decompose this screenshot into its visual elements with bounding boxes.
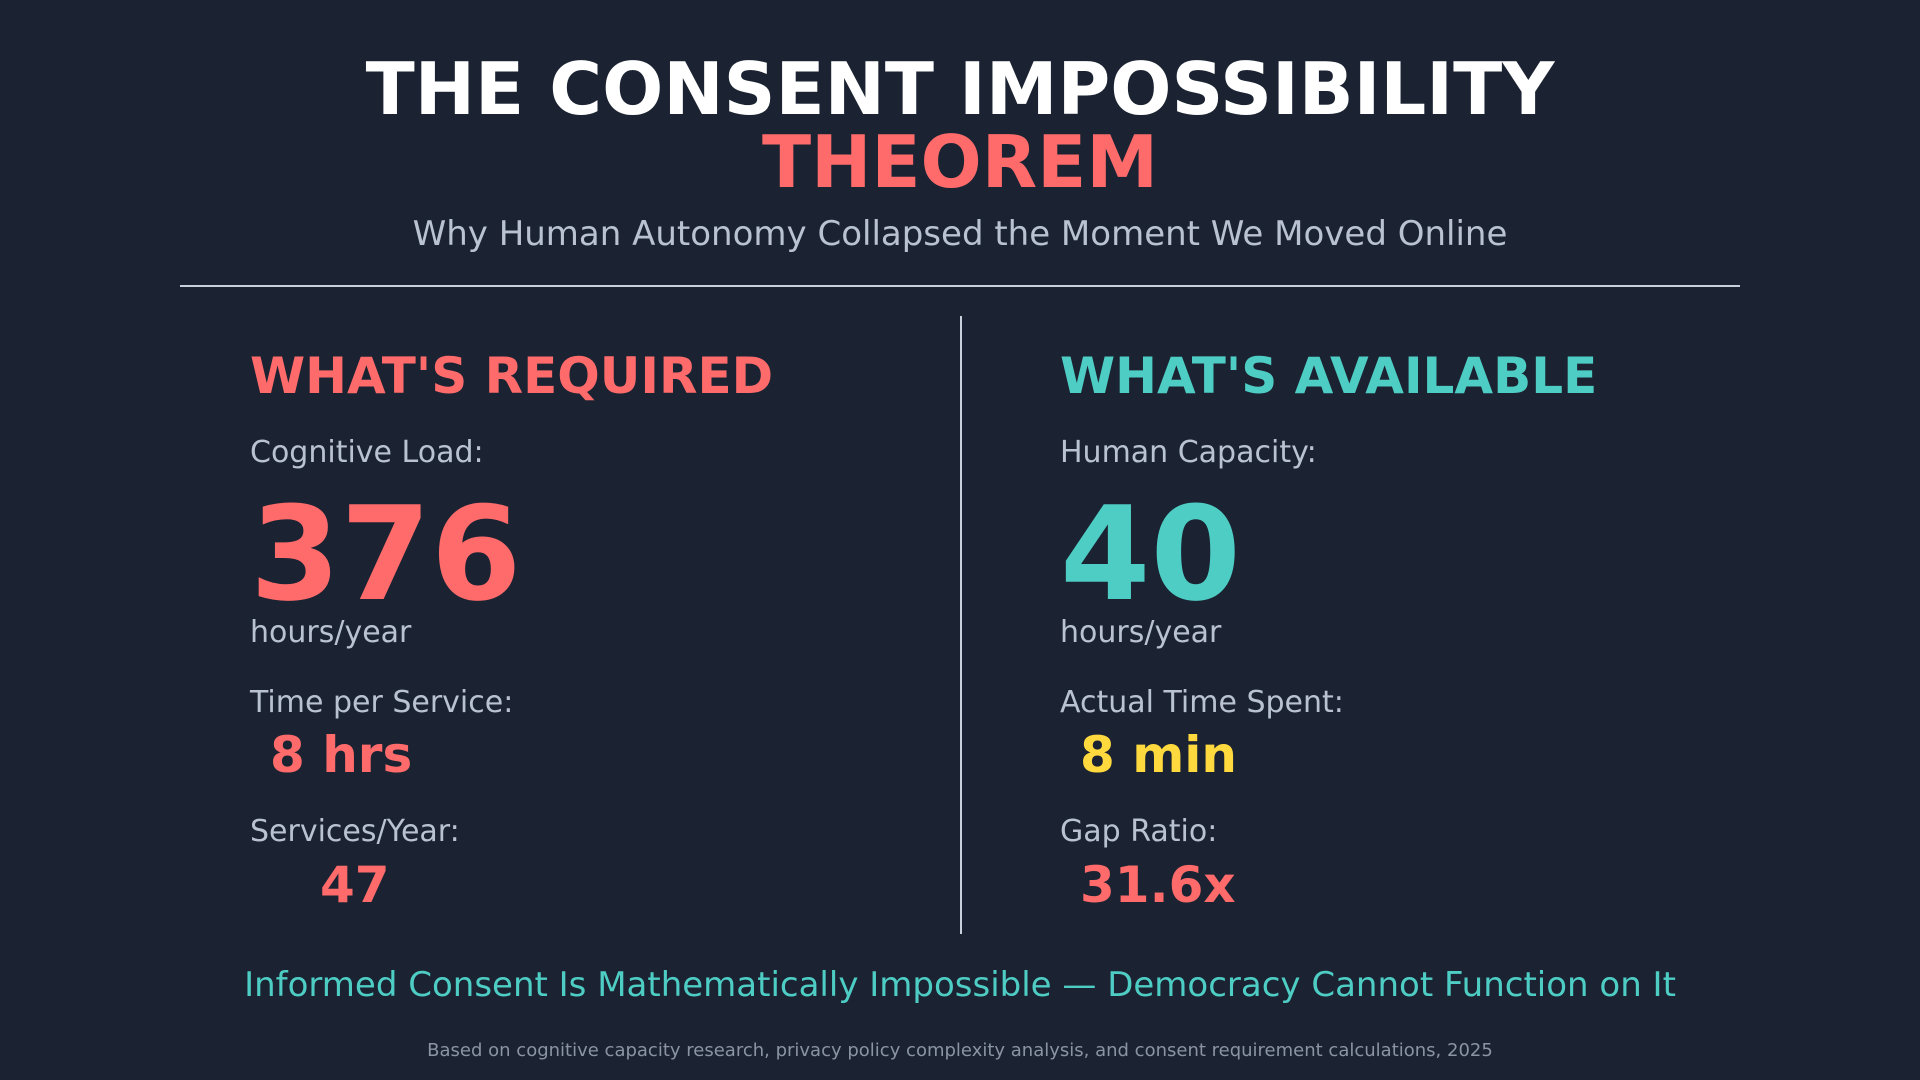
heading available: WHAT'S AVAILABLE <box>1060 347 1597 405</box>
panel: available <box>1060 347 1597 914</box>
value 8 hrs: 8 hrs <box>270 726 412 784</box>
label human capacity: Human Capacity: <box>1060 435 1317 470</box>
value 31.6x: 31.6x <box>1080 856 1236 914</box>
unit: hours/year <box>250 615 411 650</box>
subtitle: Why Human Autonomy Collapsed the Moment We Moved Online <box>413 214 1507 254</box>
value 8 min: 8 min <box>1080 726 1237 784</box>
title: THE CONSENT IMPOSSIBILITY <box>366 47 1554 131</box>
big number 376: 376 <box>250 478 521 630</box>
big number 40: 40 <box>1060 478 1241 630</box>
source: Based on cognitive capacity research, privacy policy complexity analysis, and consent requirement calculations, 2025 <box>427 1040 1493 1061</box>
label actual time: Actual Time Spent: <box>1060 685 1344 720</box>
panel: required <box>250 347 773 914</box>
title accent: THEOREM <box>762 120 1158 204</box>
conclusion: Informed Consent Is Mathematically Impossible — Democracy Cannot Function on It <box>244 965 1676 1005</box>
value 47: 47 <box>320 856 390 914</box>
label time per service: Time per Service: <box>250 685 513 720</box>
label gap ratio: Gap Ratio: <box>1060 814 1217 849</box>
unit: hours/year <box>1060 615 1221 650</box>
heading required: WHAT'S REQUIRED <box>250 347 773 405</box>
label cognitive load: Cognitive Load: <box>250 435 484 470</box>
label services/year: Services/Year: <box>250 814 460 849</box>
